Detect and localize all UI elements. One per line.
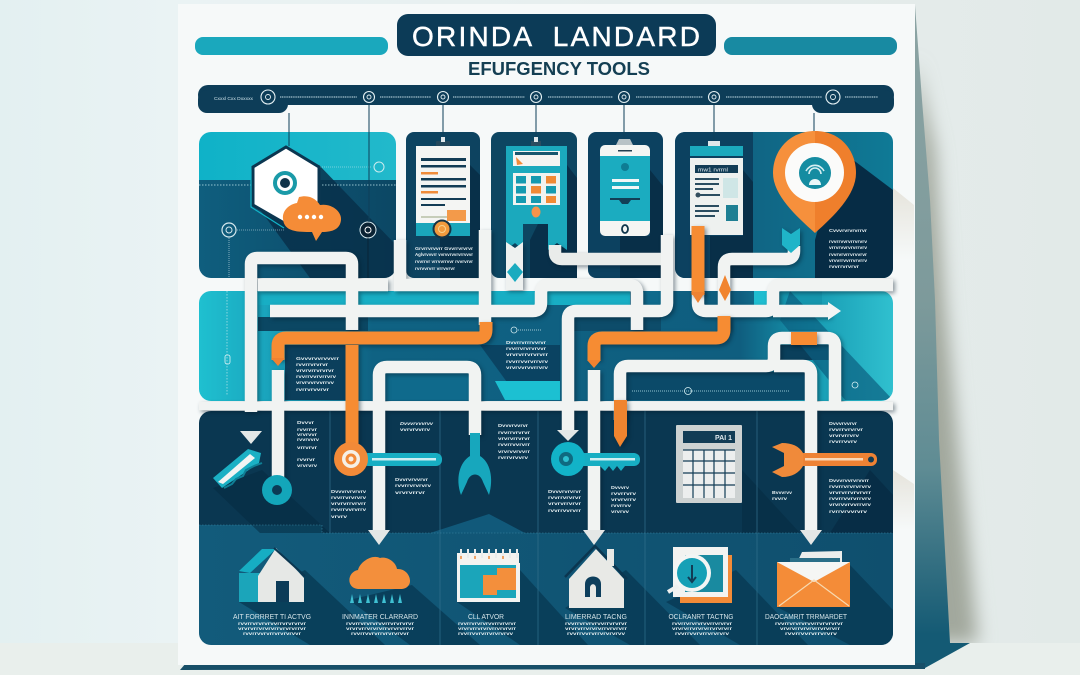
- text blocks: tool descriptions: vrrvrvr: [297, 445, 317, 450]
- text blocks: tool descriptions: Dvvvrvrvrvrv: [331, 489, 367, 494]
- text block: document caption: rvvrrvr vrrvvrrvvr rvvrvrvr: [415, 259, 473, 264]
- icon: calculator: [676, 425, 742, 503]
- text blocks: tool descriptions: rvvrrvrvrvr: [829, 427, 863, 432]
- service labels: INNMATER CLARRARD: [342, 612, 419, 621]
- title: ORINDA LANDARD: [412, 21, 700, 52]
- text blocks: tool descriptions: vrvrvrrvrvrvrr: [829, 490, 871, 495]
- title: [397, 14, 716, 56]
- text block: band left: [296, 356, 339, 392]
- panel: hexagon tool: [199, 132, 396, 278]
- panel: bottom tools and services: [199, 411, 893, 645]
- text block: band left: rvrrvrvvrvr: [296, 387, 329, 392]
- text blocks: tool descriptions: rvvrrvrvrvr: [498, 430, 530, 435]
- icon: house: [239, 548, 305, 602]
- service descriptions: rvvrrvrvrvrvvrrvrvrvrvr: [346, 621, 414, 626]
- text blocks: tool descriptions: rvvrrvvrv: [829, 439, 858, 444]
- text blocks: tool descriptions: vrvrvrrvrv: [829, 433, 860, 438]
- text blocks: tool descriptions: Dvvvrvrvrvr: [548, 489, 581, 494]
- text block: location caption: rvvrrvrvrvr: [829, 264, 859, 269]
- service labels: AIT FORRRET TI ACTVG: [233, 612, 311, 621]
- service descriptions: rvvrrvvrvrrvrvrvrvvr: [243, 631, 301, 636]
- service labels: DAOCAMRIT TRRMARDET: [765, 612, 847, 621]
- text blocks: tool descriptions: rvvrrvrvrvrv: [331, 495, 367, 500]
- service descriptions: rvvrrvvrvrrvrvrv: [785, 631, 838, 636]
- text block: band centre: [506, 327, 549, 370]
- text block: band centre: Dvvrrvrrrvvrvr: [506, 340, 546, 345]
- service descriptions: vrvrvrrvrvrvrrvrvrvrrvr: [238, 626, 306, 631]
- text block: document caption: Aglvrvvvrr vvrvvrvvrvrrvvvr: [415, 252, 473, 257]
- service descriptions: [238, 621, 843, 636]
- icon: location pin: [773, 131, 856, 233]
- text blocks: tool descriptions: vrvrvrrvrvr: [498, 436, 530, 441]
- text blocks: tool descriptions: rvvrrvrvrvrv: [395, 483, 432, 488]
- panels: top row: [199, 132, 893, 278]
- text blocks: tool descriptions: rvvrrvrv: [611, 491, 637, 496]
- text block: band left: rvvrrvvrvrrvrv: [296, 374, 337, 379]
- arrow: down to key: [240, 431, 262, 444]
- header accent bars: [195, 37, 897, 55]
- text blocks: tool descriptions: Dvvvr: [297, 420, 314, 425]
- icon: teal wrench: [458, 433, 491, 495]
- text block: band centre: rvvrrvrvrvrvvr: [506, 346, 546, 351]
- icon: calculator: PAI 1: [715, 435, 732, 442]
- text blocks: tool descriptions: rvvrrvr: [297, 427, 317, 432]
- text blocks: tool descriptions: rvvrvr: [297, 457, 315, 462]
- arrow: down to cloud: [368, 530, 390, 545]
- icon: cloud with rain: [349, 557, 410, 603]
- text blocks: tool descriptions: vrvrvrrv: [611, 497, 637, 502]
- text block: band left: vrvrvrrvrvrvr: [296, 368, 334, 373]
- icon: hexagon with speech bubble: [251, 147, 341, 241]
- text blocks: tool descriptions: rvvrv: [772, 496, 788, 501]
- text block: location caption: vrrvrvvrvrvrrvrv: [829, 245, 868, 250]
- icon: report document: mw1 rvrrnl: [698, 168, 728, 174]
- arrow: right: [828, 302, 841, 320]
- arrow: down to envelope: [800, 530, 822, 545]
- text block: document caption: Grvrrvrvvrr Gvvrrvrvrvr: [415, 246, 473, 251]
- text block: band centre: vrvrvvrvvrrvrv: [506, 365, 549, 370]
- text blocks: tool descriptions: rvrrvrvvrv: [498, 455, 529, 460]
- arrow: down to house: [583, 530, 605, 545]
- icon: tilted key: [213, 449, 262, 488]
- service descriptions: rvvrrvrvrvrvvrrvrvrvr: [458, 621, 516, 626]
- text blocks: tool descriptions: rvrrvrvvrvrv: [829, 509, 868, 514]
- text block: location caption: rvvrrvvrvrrvrvrv: [829, 239, 868, 244]
- service descriptions: rvvrrvrvrvrvvrrvrvrvrvr: [238, 621, 306, 626]
- text block: band left: rvvrrvrvrvr: [296, 362, 328, 367]
- service descriptions: rvvrrvvrvrrvrvrvrv: [675, 631, 730, 636]
- icon: checklist document: [416, 137, 470, 238]
- text block: location caption: Cvvvrvrvrvrrvr: [829, 228, 867, 233]
- panel: report and location tool: [675, 132, 893, 278]
- text blocks: tool descriptions: vrvrvvr: [297, 432, 317, 437]
- icon: teal ring: [262, 475, 292, 505]
- text block: document caption: [415, 246, 473, 271]
- text block: band left: Gvvvrvvrvvvrr: [296, 356, 339, 361]
- timeline bar: [198, 85, 894, 222]
- text blocks: tool descriptions: rvvrrvvrvrr: [498, 442, 530, 447]
- text blocks: tool descriptions: rvvrrvvrvrr: [548, 508, 581, 513]
- text blocks: tool descriptions: rvvrrvvrvrrv: [331, 507, 367, 512]
- text blocks: tool descriptions: vrvrvv: [611, 509, 630, 514]
- orange connector pipes: [278, 226, 817, 447]
- arrow: orange tip centre: [587, 360, 601, 368]
- text blocks: tool descriptions: vrvrvrrvr: [395, 490, 425, 495]
- text blocks: tool descriptions: vvrvrvvrrv: [400, 427, 431, 432]
- text blocks: tool descriptions: Dvvvrvvvrvv: [400, 421, 434, 426]
- text blocks: tool descriptions: rvvrrvrvrvrvrv: [829, 484, 872, 489]
- text blocks: tool descriptions: rvvrrvv: [611, 503, 632, 508]
- service descriptions: rvvrrvvrvrrvrvrvrvv: [567, 631, 626, 636]
- service descriptions: vrvrvrrvrvrvrrvrvrvrrvr: [346, 626, 414, 631]
- timeline bar: Cxxxl Cxx Dxxxxx: [214, 96, 254, 101]
- text block: band left: vrvrvvrvvrrvv: [296, 380, 335, 385]
- paper sheet: [178, 4, 925, 670]
- text blocks: tool descriptions: rvvrrvrvrvr: [548, 495, 581, 500]
- text blocks: tool descriptions: vrvrvvrvvrrvrv: [829, 502, 872, 507]
- service descriptions: rvvrrvrvrvrvvrrvrvrvr: [672, 621, 732, 626]
- icon: document with magnifier: [668, 547, 732, 603]
- icon: calculator form: [506, 137, 567, 250]
- text block: band centre: rvvrrvvrvrrvrv: [506, 359, 549, 364]
- text blocks: tool descriptions: vrvrvrv: [297, 463, 318, 468]
- icon: teal key: [551, 442, 640, 476]
- service descriptions: rvvrrvrvrvrvvrrvrvrvrvr: [775, 621, 843, 626]
- text block: location caption: rvvrvrvrrvrvvrvr: [829, 252, 867, 257]
- text blocks: tool descriptions: vrvrv: [331, 514, 348, 519]
- icon: envelope folder: [777, 551, 850, 607]
- service descriptions: rvvrrvvrvrrvrvrvrvvr: [351, 631, 409, 636]
- text blocks: tool descriptions: Dvvvrvvrvr: [498, 423, 528, 428]
- text block: document caption: rvrvvrvrr vrrvvrvr: [415, 266, 455, 271]
- text blocks: tool descriptions: Bvvvrvv: [772, 490, 793, 495]
- icon: house outline: [565, 546, 627, 608]
- icon: orange key: [334, 442, 442, 476]
- background wall: [915, 0, 1080, 668]
- text block: band centre: vrvrvrrvrvrvrr: [506, 352, 548, 357]
- icon: report document: [690, 141, 743, 235]
- arrow: orange tip left: [271, 358, 285, 366]
- service labels: LIMERRAD TACNG: [565, 612, 627, 621]
- icon: orange wrench: [772, 443, 877, 477]
- service descriptions: vrvrvrrvrvrvrrvrvrvrr: [780, 626, 840, 631]
- text blocks: tool descriptions: Dvvvrvvrvr: [829, 421, 857, 426]
- service labels: CLL ATVOR: [468, 612, 505, 621]
- text blocks: tool descriptions: Dvvrvrvvrvr: [395, 477, 428, 482]
- icon: smartphone: [600, 139, 650, 236]
- arrow: orange diamond: [719, 275, 731, 301]
- service descriptions: vrvrvrrvrvrvrrvrvrvrr: [672, 626, 732, 631]
- text blocks: tool descriptions: rvvrvvrv: [297, 437, 320, 442]
- text blocks: tool descriptions: rvvrrvvrvrrvrv: [829, 496, 872, 501]
- service descriptions: rvvrrvvrvrrvrvrvrvv: [458, 631, 514, 636]
- text block: location caption: vrvvrrvvrrvrvrrv: [829, 258, 868, 263]
- panel: middle band: [199, 291, 893, 401]
- panel: document tool: [406, 132, 480, 278]
- panel: calculator form tool: [491, 132, 577, 278]
- service descriptions: vrvrvrrvrvrvrrvrvrvrr: [458, 626, 516, 631]
- text block: location caption: [829, 228, 868, 269]
- text blocks: tool descriptions: vrvrvvrvvrr: [498, 449, 530, 454]
- text blocks: tool descriptions: vrvrvrrvrvr: [548, 501, 581, 506]
- long shadows: [213, 470, 330, 533]
- service descriptions: vrvrvrrvrvrvrrvrvrvrr: [565, 626, 627, 631]
- service labels: OCLRANRT TACTNG: [668, 612, 734, 621]
- service descriptions: rvvrrvrvrvrvvrrvrvrvr: [565, 621, 627, 626]
- text blocks: tool descriptions: [297, 420, 872, 519]
- service labels: [233, 612, 847, 621]
- icon: calendar: [457, 549, 520, 602]
- white connector pipes: [199, 228, 893, 530]
- subtitle: EFUFGENCY TOOLS: [468, 59, 650, 79]
- text blocks: tool descriptions: Dvvvrv: [611, 485, 630, 490]
- panel: phone tool: [588, 132, 663, 278]
- arrow: down to second key: [557, 430, 579, 441]
- arrow: orange tip upper: [691, 292, 705, 303]
- text blocks: tool descriptions: Dvvvrvvrvrvvrr: [829, 478, 869, 483]
- arrowheads: [240, 275, 841, 545]
- text blocks: tool descriptions: vrvrvrrvrvrr: [331, 501, 366, 506]
